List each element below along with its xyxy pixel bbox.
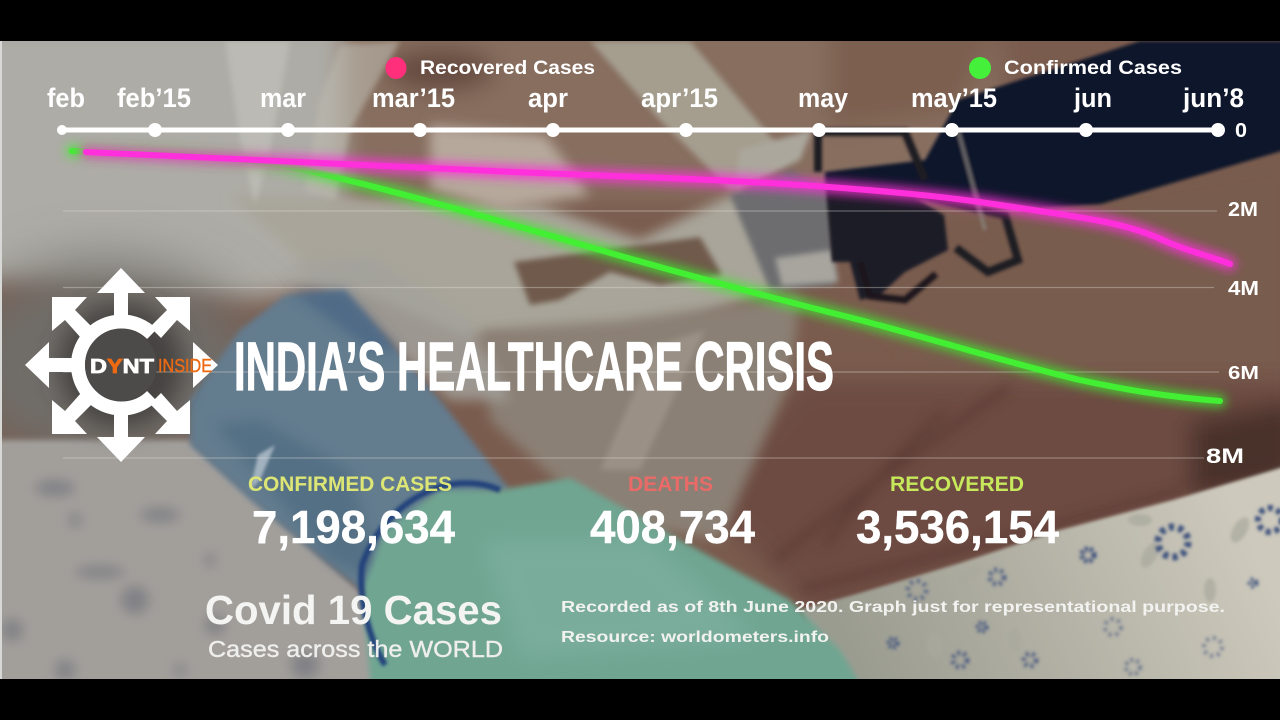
y axis labels: 2M [1228, 199, 1258, 221]
source note: Recorded as of 8th June 2020. Graph just for representational purpose. [561, 599, 1225, 616]
skin tones [330, 20, 1280, 620]
stat: deaths: 408,734 [590, 501, 755, 553]
dark headgear strap [818, 41, 1280, 300]
stat: recovered: RECOVERED [890, 472, 1024, 496]
logo text [90, 356, 212, 378]
timeline axis: apr’15 [641, 83, 718, 113]
fingers folds [809, 390, 1144, 587]
y axis labels: 8M [1206, 445, 1244, 468]
ring [78, 322, 152, 408]
diagonal arrow upper left [52, 297, 92, 338]
diagonal arrow lower left [52, 393, 92, 434]
footer heading: Covid 19 Cases [205, 587, 502, 633]
stat: recovered [856, 472, 1059, 553]
y axis labels [1206, 120, 1259, 468]
light wall left [2, 41, 378, 312]
timeline axis: jun [1073, 83, 1112, 113]
blue tube connector [190, 290, 510, 590]
legend: confirmed cases: Confirmed Cases [1004, 58, 1182, 79]
mask shell [225, 41, 838, 540]
line: confirmed cases [72, 151, 1220, 401]
footer heading: Cases across the WORLD [208, 636, 503, 662]
stat: deaths [590, 472, 755, 553]
footer heading [205, 587, 503, 662]
diagonal arrow lower right [150, 393, 190, 434]
logo text: INSIDE [158, 356, 212, 376]
diagonal arrow upper right [150, 297, 190, 338]
timeline axis: jun’8 [1182, 83, 1244, 113]
up arrow [97, 268, 145, 325]
line: recovered cases [86, 152, 1230, 264]
timeline axis: feb [47, 83, 85, 113]
legend: recovered cases: Recovered Cases [420, 58, 595, 79]
stat: confirmed cases: 7,198,634 [252, 501, 455, 553]
source note: Resource: worldometers.info [561, 629, 829, 646]
y axis labels: 0 [1235, 120, 1247, 142]
stat: confirmed cases [248, 472, 455, 553]
y axis labels: 6M [1228, 363, 1259, 383]
left arrow [25, 342, 80, 388]
gridlines [63, 211, 1219, 458]
sheet flower pattern [1128, 514, 1250, 602]
title: INDIA’S HEALTHCARE CRISIS [234, 328, 834, 405]
left frame edge [0, 41, 2, 679]
dark vignette behind logo [59, 303, 183, 427]
logo: DYNT Inside [25, 268, 218, 462]
timeline axis: may [798, 83, 848, 113]
hospital sheet right [800, 465, 1280, 700]
stat: deaths: DEATHS [628, 472, 713, 496]
stat: recovered: 3,536,154 [856, 501, 1059, 553]
right arrow [193, 342, 218, 388]
timeline axis [47, 83, 1244, 137]
timeline axis: mar’15 [372, 83, 455, 113]
timeline axis: apr [528, 83, 568, 113]
logo text: DYNT [90, 356, 154, 378]
dark band around logo [0, 265, 255, 465]
timeline axis: mar [260, 83, 306, 113]
timeline axis: feb’15 [117, 83, 191, 113]
timeline axis: may’15 [911, 83, 997, 113]
stat: confirmed cases: CONFIRMED CASES [248, 472, 452, 496]
source note [561, 599, 1225, 646]
green oxygen bag [361, 478, 870, 700]
y axis labels: 4M [1228, 278, 1259, 300]
sheet left pattern [1, 480, 319, 680]
hospital sheet left [2, 437, 374, 679]
down arrow [97, 405, 145, 462]
